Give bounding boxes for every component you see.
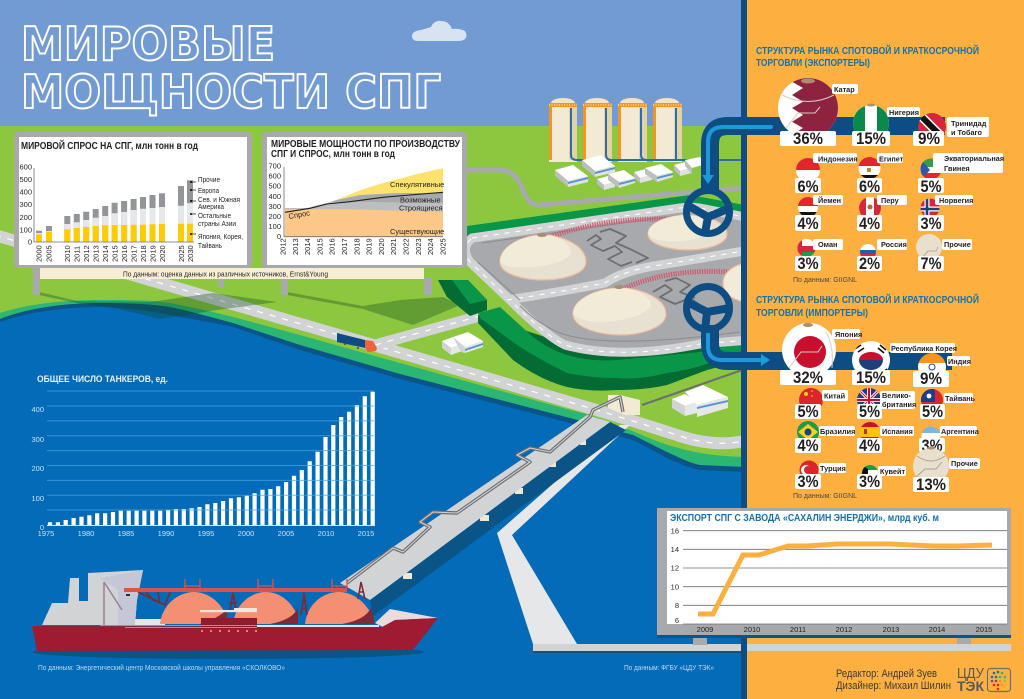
sea (0, 307, 745, 699)
importer: Turkey: Турция (820, 464, 846, 473)
area: under construction (285, 202, 443, 212)
axes (34, 168, 194, 242)
tanker axis labels: 400 (31, 405, 44, 414)
tanker axis labels: 1985 (118, 529, 134, 538)
exporter: Qatar: 36% (793, 130, 823, 148)
tanker axis labels: 300 (31, 435, 44, 444)
LNG storage dome 4 (723, 263, 750, 302)
y axis labels: 500 (268, 182, 281, 191)
x axis labels: 2022 (402, 238, 410, 255)
x axis labels: 2013 (291, 238, 300, 255)
x axis labels: 2017 (129, 245, 138, 262)
x axis labels: 2016 (328, 238, 337, 255)
exporter: others: 7% (920, 255, 942, 273)
importer: Taiwan: Тайвань (945, 394, 976, 403)
y axis labels: 200 (268, 212, 281, 221)
tanker chart (31, 374, 375, 538)
importer: Taiwan (920, 389, 976, 421)
silo 1 (549, 98, 577, 162)
land background (0, 126, 745, 486)
exporter: others: Прочие (944, 240, 971, 249)
x axis labels (34, 245, 195, 262)
x axis labels: 2018 (139, 245, 148, 262)
y axis labels: 0 (28, 237, 32, 246)
sky background (0, 0, 745, 127)
legend: Америка (198, 202, 225, 211)
LNG storage dome 1 (500, 233, 586, 280)
trusses (138, 582, 365, 615)
tanker axis labels: 1990 (158, 529, 174, 538)
x axis labels: 2013 (883, 625, 899, 634)
exporter: Norway (918, 195, 973, 233)
shoreline strip (0, 300, 745, 480)
pink pipeline arcs (553, 219, 732, 288)
stacked bars: middle segment (36, 203, 193, 242)
exporter: Russia (857, 239, 907, 273)
LNG storage dome 2 (648, 215, 727, 250)
legend (190, 175, 243, 250)
exporter: Nigeria: Нигерия (889, 108, 919, 117)
importer: India: Индия (948, 357, 971, 366)
x axis labels: 2012 (278, 238, 288, 255)
heading: ЭКСПОРТ СПГ С ЗАВОДА «САХАЛИН ЭНЕРДЖИ», млрд куб. м (670, 512, 939, 524)
logo: ТЭК (957, 678, 984, 694)
top valve wheel (686, 190, 730, 234)
tanker axis labels: 1975 (38, 529, 54, 538)
x axis labels: 2021 (389, 238, 398, 255)
cloud (412, 21, 466, 41)
title: МОЩНОСТИ СПГ (21, 65, 441, 119)
source caption strip: По данным: оценка данных из различных источников, Ernst&Young (123, 270, 328, 278)
exporter: Egypt: 6% (859, 178, 880, 196)
silo 4 (653, 98, 682, 162)
terminal green embankment (438, 195, 745, 391)
importer: Kuwait: Кувейт (880, 467, 905, 476)
panel edge (741, 0, 747, 699)
x axis labels: 2013 (92, 245, 100, 262)
x axis labels: 2024 (426, 238, 435, 255)
y axis labels: 700 (268, 162, 281, 170)
logo (957, 665, 1010, 694)
importer: others: Прочие (951, 459, 978, 468)
importer: Kuwait: 3% (859, 473, 880, 491)
heading: МИРОВОЙ СПРОС НА СПГ, млн тонн в год (21, 139, 198, 152)
stacked bars: Japan, Korea, Taiwan (36, 224, 193, 242)
pier shadow (370, 422, 626, 616)
export line (698, 544, 992, 614)
x axis labels (697, 625, 992, 634)
coastal road (0, 235, 745, 443)
x axis labels: 2025 (177, 245, 186, 262)
exporter: Yemen: 4% (798, 215, 819, 233)
importer: United Kingdom (857, 388, 916, 421)
credits: Редактор: Андрей Зуев (836, 668, 937, 680)
x axis labels: 2011 (790, 625, 806, 634)
y axis labels: 0 (277, 232, 281, 241)
importer: India: 9% (920, 370, 942, 388)
heading: exporters: СТРУКТУРА РЫНКА СПОТОВОЙ И КРАТКОСРОЧНОЙ (756, 44, 979, 57)
x axis labels: 2023 (414, 238, 423, 255)
importer: Brazil: 4% (798, 437, 819, 455)
exporter: Trinidad and Tobago: и Тобаго (951, 128, 982, 137)
x axis labels: 2017 (340, 238, 349, 255)
importer: United Kingdom: 5% (859, 403, 880, 421)
exporter: Equatorial Guinea: 5% (920, 178, 942, 196)
deck lights (201, 630, 257, 632)
exporter: Yemen: Йемен (818, 196, 841, 205)
x axis labels: 2019 (365, 238, 374, 255)
importer: Japan: 32% (793, 369, 823, 387)
y axis labels: 100 (19, 225, 32, 234)
source caption strip (40, 268, 424, 279)
panel: world LNG demand (14, 132, 252, 268)
x axis labels: 2020 (158, 245, 167, 262)
x axis labels: 2012 (82, 245, 91, 262)
heading: importers (756, 293, 979, 319)
importer: South Korea: Республика Корея (891, 344, 957, 353)
sea shadow band (0, 303, 745, 500)
heading: importers: ТОРГОВЛИ (ИМПОРТЕРЫ) (756, 307, 868, 319)
billboard shadows on land (39, 292, 460, 325)
LNG storage dome 3 (573, 285, 666, 335)
x axis labels: 2019 (148, 245, 157, 262)
importer: Japan: Япония (835, 330, 862, 339)
legend: Сев. и Южная (198, 195, 240, 204)
y axis labels: 6 (675, 616, 679, 625)
bottom valve wheel (686, 286, 730, 330)
x axis labels: 2010 (63, 245, 72, 262)
tanker axis labels: 0 (40, 523, 44, 532)
x axis labels: 2015 (315, 238, 324, 255)
terminal platform (465, 207, 750, 352)
x axis labels: 2012 (836, 625, 852, 634)
series labels (288, 180, 444, 236)
exporter: Russia: Россия (881, 240, 907, 249)
tanker axis labels: 2010 (318, 529, 334, 538)
y axis labels: 8 (675, 601, 679, 610)
axes (284, 167, 443, 237)
x axis labels: 2018 (352, 238, 361, 255)
x axis labels: 2010 (744, 625, 760, 634)
exporter: Trinidad and Tobago: Тринидад (951, 119, 987, 128)
source note: Sakhalin: По данным: ФГБУ «ЦДУ ТЭК» (624, 663, 714, 672)
heading: importers: СТРУКТУРА РЫНКА СПОТОВОЙ И КРАТКОСРОЧНОЙ (756, 293, 979, 306)
ship shadow (32, 645, 424, 659)
exporter: Equatorial Guinea: Гвинея (944, 164, 970, 173)
top pipe (702, 126, 945, 192)
exporter: Indonesia: 6% (798, 178, 819, 196)
importer: Turkey: 3% (798, 473, 819, 491)
exporter: Oman: Оман (818, 240, 837, 249)
y axis labels: 600 (268, 172, 281, 181)
series labels: Возможные (400, 196, 440, 204)
x axis labels: 2016 (120, 245, 129, 262)
billboard legs (693, 635, 971, 645)
x axis labels: 2020 (377, 238, 386, 255)
tanker bars (48, 392, 375, 525)
area: existing (285, 209, 443, 237)
source note: tankers: По данным: Энергетический центр Московской школы управления «СКОЛКОВО» (38, 663, 285, 672)
pier pipeline (347, 397, 623, 583)
importer: Taiwan: 5% (922, 403, 943, 421)
hull (32, 618, 438, 651)
terminal pipework (587, 229, 700, 305)
heading: СПГ И СПРОС, млн тонн в год (271, 148, 395, 160)
y axis labels: 300 (19, 200, 32, 209)
importer: Brazil (795, 421, 855, 455)
importer: United Kingdom: британия (882, 400, 916, 409)
importer: China (795, 388, 848, 421)
y axis labels: 10 (671, 582, 679, 591)
y axis labels: 12 (671, 564, 679, 573)
heading (271, 138, 460, 160)
tanker axis labels: 1995 (198, 529, 214, 538)
importer: Argentina: 3% (922, 437, 943, 455)
area: possible (320, 193, 443, 205)
exporter: Egypt (857, 153, 904, 196)
y axis labels: 16 (671, 526, 679, 536)
tanker axis labels: 1980 (78, 529, 94, 538)
importer: Brazil: Бразилия (820, 427, 855, 436)
source note: importers: По данным: GIIGNL (793, 493, 857, 500)
x axis labels: 2000 (34, 245, 44, 262)
stacked bars: upper segment (36, 180, 193, 242)
y axis labels (268, 162, 281, 241)
importer: Kuwait (857, 465, 906, 491)
exporter: Indonesia (795, 153, 858, 196)
exporter: Nigeria: 15% (856, 130, 886, 148)
centre structure (100, 608, 257, 628)
exporter: Trinidad and Tobago: 9% (918, 130, 940, 148)
y axis labels: 600 (19, 162, 32, 171)
importer: United Kingdom: Велико- (882, 391, 911, 400)
importer: Spain: 4% (859, 437, 880, 455)
x axis labels: 2015 (976, 625, 992, 634)
silo 2 (583, 98, 612, 162)
x axis labels (278, 238, 447, 255)
x axis labels: 2014 (303, 238, 312, 255)
importer: Spain: Испания (882, 427, 913, 436)
exporter: Qatar: Катар (834, 85, 855, 94)
superstructure (42, 570, 143, 625)
exporter: Egypt: Египет (879, 154, 904, 164)
title: МИРОВЫЕ (21, 17, 275, 71)
x axis labels: 2015 (110, 245, 119, 262)
overhead gantry (124, 579, 347, 592)
importer: China: Китай (824, 392, 845, 400)
credits (836, 668, 951, 692)
exporter: Nigeria (852, 104, 920, 148)
y axis labels: 400 (19, 188, 32, 197)
importer: Argentina (919, 426, 979, 452)
service road to terminal (460, 170, 745, 205)
tanker axis labels: 2000 (238, 529, 254, 538)
importer: Argentina: Аргентина (941, 427, 980, 436)
logo: ЦДУ (957, 665, 984, 682)
importer: South Korea: 15% (856, 369, 886, 387)
zigzag breakwater (497, 425, 1011, 653)
exporter: Equatorial Guinea: Экваториальная (944, 154, 1004, 163)
y axis labels: 100 (268, 222, 281, 231)
orange panel (747, 0, 1024, 699)
silo 3 (618, 98, 647, 162)
pier deck (340, 415, 610, 600)
tanker axis labels (31, 405, 374, 538)
heading: exporters (756, 44, 979, 69)
source note: exporters: По данным: GIIGNL (793, 277, 857, 284)
y axis labels (19, 162, 32, 246)
heading: МИРОВЫЕ МОЩНОСТИ ПО ПРОИЗВОДСТВУ (271, 138, 460, 150)
importer: others: 13% (916, 476, 946, 494)
plant buildings (442, 155, 728, 417)
LNG tanker ship (32, 570, 438, 659)
x axis labels: 2011 (72, 246, 82, 262)
exporter: Indonesia: Индонезия (818, 154, 858, 164)
tanker axis labels: 2015 (358, 529, 374, 538)
series labels: Строящиеся (399, 204, 443, 212)
bottom pipe (708, 325, 952, 366)
y axis labels: 300 (268, 202, 281, 211)
exporter: Norway: 3% (920, 215, 942, 233)
credits: Дизайнер: Михаил Шилин (836, 680, 951, 692)
area: speculative (333, 168, 443, 201)
exporter: Yemen (795, 195, 843, 233)
legend: Остальные (198, 211, 231, 220)
x axis labels: 2005 (44, 245, 54, 262)
series labels: Спрос (288, 208, 311, 221)
exporter: Qatar (778, 75, 858, 148)
legend: Прочие (198, 175, 220, 184)
pier supports (403, 440, 586, 579)
y axis labels: 200 (19, 213, 32, 222)
x axis labels: 2014 (929, 625, 945, 634)
exporter: Peru: Перу (881, 196, 900, 205)
tanker axis labels: 100 (31, 494, 44, 503)
silo feed pipes (571, 108, 745, 160)
silo tanks (549, 98, 682, 162)
tanker grid (47, 391, 374, 510)
importer: China: 5% (798, 403, 819, 421)
billboard legs (33, 266, 432, 295)
exporter: Peru: 4% (859, 215, 880, 233)
x axis labels: 2025 (438, 238, 447, 255)
exporter: others (916, 234, 972, 273)
tanker axis labels: 2005 (278, 529, 294, 538)
exporter: Peru (857, 195, 907, 233)
series labels: Спекулятивные (390, 180, 444, 189)
x axis labels: 2030 (186, 245, 195, 262)
legend: Япония, Корея, (198, 232, 243, 241)
demand line (285, 192, 443, 212)
series labels: Существующие (390, 227, 444, 236)
importer: South Korea (852, 341, 957, 387)
legend: Тайвань (198, 241, 222, 250)
exporter: Trinidad and Tobago (913, 113, 989, 148)
importer: others (913, 446, 980, 494)
truck (337, 333, 377, 352)
grid (683, 531, 1007, 624)
exporter: Oman: 3% (798, 255, 819, 273)
y axis labels (671, 526, 679, 625)
exporter: Equatorial Guinea (918, 153, 1004, 196)
panel: Sakhalin Energy export chart (657, 508, 1011, 645)
importer: Turkey (795, 460, 846, 491)
exporter: Norway: Норвегия (939, 196, 973, 205)
x axis labels: 2009 (697, 625, 713, 634)
importer: Japan (780, 323, 862, 387)
chart title: ОБЩЕЕ ЧИСЛО ТАНКЕРОВ, ед. (37, 374, 168, 385)
tanker axis labels: 200 (31, 464, 44, 473)
breakwater deck across panel (747, 644, 1011, 651)
exporter: Russia: 2% (859, 255, 880, 273)
importer: India (913, 353, 971, 388)
title (21, 17, 441, 119)
importer: Spain (857, 422, 914, 455)
x axis labels: 2014 (101, 245, 110, 262)
y axis labels: 14 (671, 545, 679, 554)
bow deck (375, 609, 438, 627)
exporter: Oman (795, 239, 843, 273)
panel: capacity and demand (262, 132, 467, 268)
legend: страны Азии (198, 219, 236, 228)
y axis labels: 500 (19, 175, 32, 184)
jetty head building (608, 369, 745, 415)
legend: Европа (198, 186, 220, 195)
heading: exporters: ТОРГОВЛИ (ЭКСПОРТЕРЫ) (756, 57, 870, 69)
y axis labels: 400 (268, 192, 281, 201)
cargo domes (160, 592, 375, 624)
